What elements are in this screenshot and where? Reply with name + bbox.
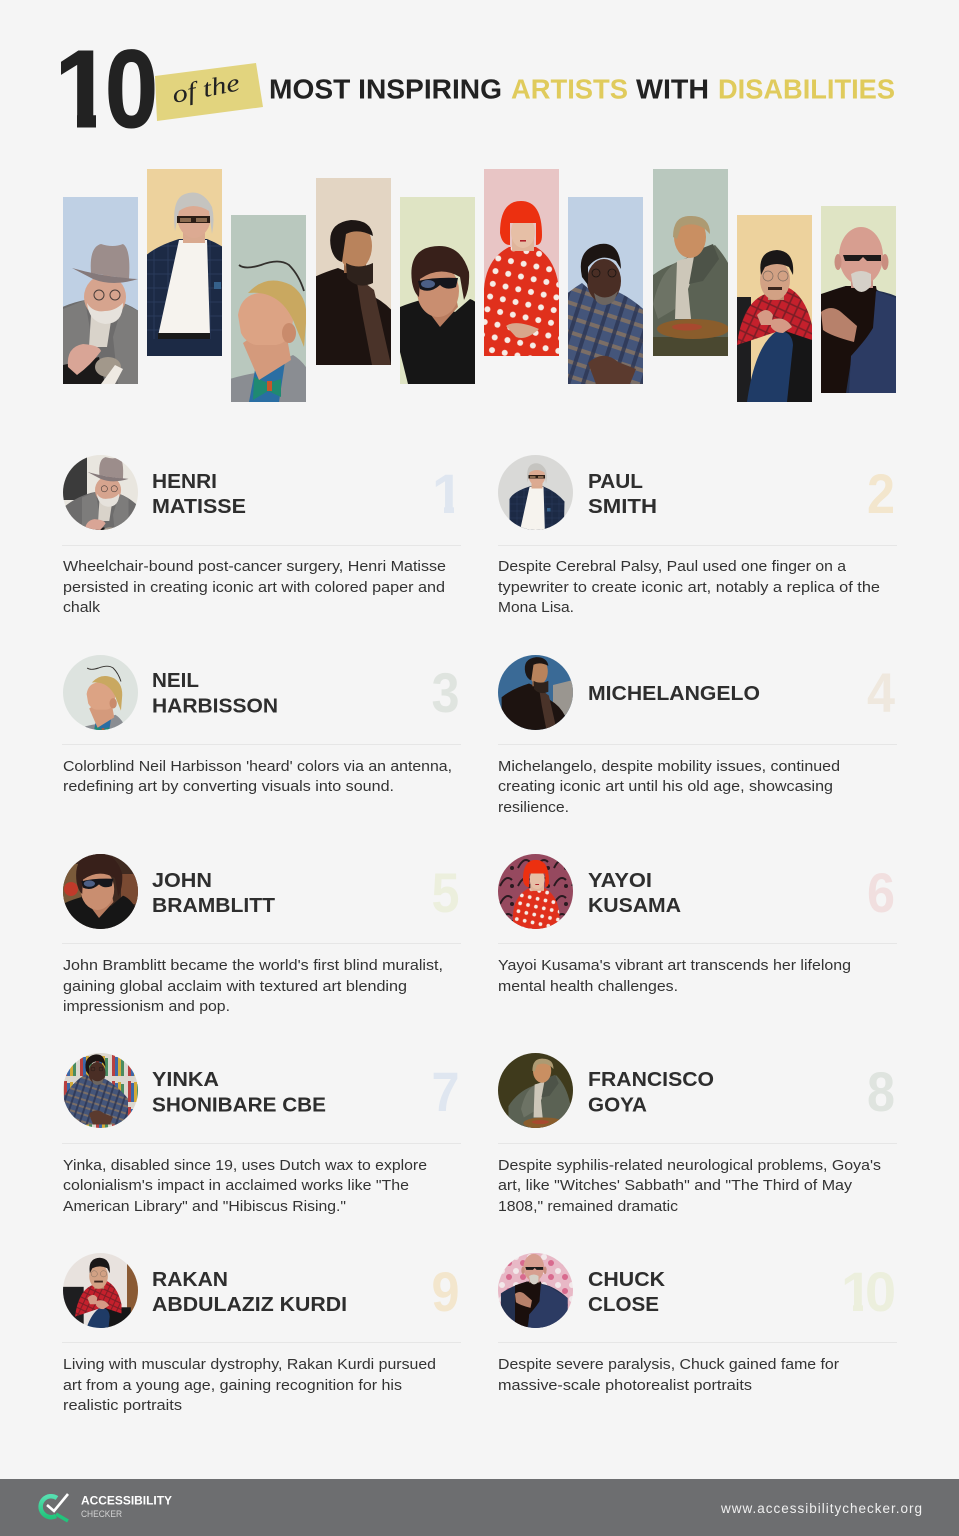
name: ABDULAZIZ KURDI xyxy=(152,1293,347,1316)
portrait strip xyxy=(33,169,933,402)
description: Wheelchair-bound post-cancer surgery, Henri Matisse xyxy=(63,558,446,575)
name: CLOSE xyxy=(588,1293,659,1316)
portrait: Paul Smith xyxy=(147,169,222,356)
name xyxy=(152,470,246,518)
name xyxy=(152,1268,347,1316)
description: impressionism and pop. xyxy=(63,998,230,1015)
footer xyxy=(0,1479,959,1536)
name: MATISSE xyxy=(152,495,246,518)
description xyxy=(63,1356,436,1414)
description: art from a young age, gaining recognition for his xyxy=(63,1377,402,1394)
title text: DISABILITIES xyxy=(718,74,895,104)
website url: www.accessibilitychecker.org xyxy=(720,1501,922,1516)
name: FRANCISCO xyxy=(588,1068,714,1091)
name: JOHN xyxy=(152,869,212,892)
logo wordmark xyxy=(81,1496,172,1519)
description xyxy=(63,758,452,795)
title text: MOST INSPIRING xyxy=(269,74,502,104)
description: mental health challenges. xyxy=(498,978,678,995)
card 10: Chuck Close xyxy=(498,1253,897,1394)
name xyxy=(588,1068,714,1116)
description: Mona Lisa. xyxy=(498,599,574,616)
number: 5 xyxy=(432,861,460,924)
description: chalk xyxy=(63,599,100,616)
name: CHUCK xyxy=(588,1268,665,1291)
card 5: John Bramblitt xyxy=(55,853,461,1015)
description xyxy=(63,957,443,1015)
portrait: Michelangelo xyxy=(316,178,391,365)
name: YINKA xyxy=(152,1068,219,1091)
description: Despite severe paralysis, Chuck gained fame for xyxy=(498,1356,839,1373)
name xyxy=(152,669,278,718)
description xyxy=(63,558,446,616)
name: YAYOI xyxy=(588,869,652,892)
name: SHONIBARE CBE xyxy=(152,1094,326,1116)
number xyxy=(844,1272,894,1312)
name: PAUL xyxy=(588,470,643,493)
icon: accessibility checker logo xyxy=(41,1494,68,1521)
description: Living with muscular dystrophy, Rakan Kurdi pursued xyxy=(63,1356,436,1373)
avatar xyxy=(63,655,138,730)
description: typewriter to create iconic art, notably a replica of the xyxy=(498,579,880,596)
description: Michelangelo, despite mobility issues, continued xyxy=(498,758,840,775)
card 1: Henri Matisse xyxy=(62,455,463,616)
number: 1 xyxy=(841,1260,872,1323)
title xyxy=(61,49,894,128)
description xyxy=(498,957,851,995)
number: 2 xyxy=(867,462,895,525)
description: massive-scale photorealist portraits xyxy=(498,1377,752,1394)
yellow banner: of the xyxy=(155,63,263,121)
title text: WITH xyxy=(636,74,709,104)
title text: ARTISTS xyxy=(511,74,628,104)
description: resilience. xyxy=(498,799,569,816)
title text xyxy=(269,74,895,104)
description xyxy=(63,1157,427,1215)
description: gaining global acclaim with textured art blending xyxy=(63,978,407,995)
logo wordmark: CHECKER xyxy=(81,1509,122,1519)
name: HARBISSON xyxy=(152,694,278,718)
avatar xyxy=(63,455,138,530)
description xyxy=(498,1157,881,1215)
avatar xyxy=(498,1053,573,1128)
number: 4 xyxy=(867,661,895,724)
description xyxy=(498,558,880,616)
name: RAKAN xyxy=(152,1268,228,1291)
number: 3 xyxy=(432,661,460,724)
portrait: Neil Harbisson xyxy=(231,215,306,402)
description xyxy=(498,1356,839,1394)
avatar xyxy=(498,455,573,530)
avatar xyxy=(498,655,573,737)
card 6: Yayoi Kusama xyxy=(498,854,897,995)
description: art, like "Witches' Sabbath" and "The Third of May xyxy=(498,1177,852,1194)
number: 0 xyxy=(865,1260,896,1323)
avatar xyxy=(63,1253,138,1328)
portrait: Henri Matisse xyxy=(63,197,138,384)
name xyxy=(588,470,657,518)
name xyxy=(588,869,681,917)
number: 8 xyxy=(867,1060,895,1123)
description: 1808," remained dramatic xyxy=(498,1198,678,1215)
description: John Bramblitt became the world's first blind muralist, xyxy=(63,957,443,974)
name: NEIL xyxy=(152,669,199,692)
number: 6 xyxy=(867,861,895,924)
name xyxy=(152,869,275,917)
portrait: Yinka Shonibare xyxy=(568,197,643,384)
card 2: Paul Smith xyxy=(498,455,897,616)
portrait: Yayoi Kusama xyxy=(484,169,559,356)
card 8: Francisco Goya xyxy=(498,1053,897,1215)
card 7: Yinka Shonibare xyxy=(62,1053,461,1215)
name xyxy=(152,1068,326,1116)
avatar xyxy=(63,1053,138,1128)
portrait: Francisco Goya xyxy=(653,169,728,356)
description: redefining art by converting visuals into sound. xyxy=(63,778,394,795)
title number 10: 0 xyxy=(105,28,158,151)
description: colonialism's impact in acclaimed works like "The xyxy=(63,1177,409,1194)
portrait: Chuck Close xyxy=(821,206,896,393)
title number 10 xyxy=(61,49,154,128)
name: KUSAMA xyxy=(588,894,681,917)
description xyxy=(498,758,840,816)
number: 7 xyxy=(432,1060,460,1123)
description: American Library" and "Hibiscus Rising." xyxy=(63,1198,346,1215)
name xyxy=(588,1268,665,1316)
name: GOYA xyxy=(588,1094,647,1116)
avatar xyxy=(498,854,573,929)
description: creating iconic art until his old age, showcasing xyxy=(498,778,833,795)
name: HENRI xyxy=(152,470,217,493)
description: Yinka, disabled since 19, uses Dutch wax to explore xyxy=(63,1157,427,1174)
description: realistic portraits xyxy=(63,1397,182,1414)
logo wordmark: ACCESSIBILITY xyxy=(81,1496,172,1508)
avatar xyxy=(498,1253,573,1332)
name: MICHELANGELO xyxy=(588,682,760,705)
yellow banner: of the: of the xyxy=(170,69,242,109)
title number 10: 1 xyxy=(52,28,113,151)
description: Colorblind Neil Harbisson 'heard' colors via an antenna, xyxy=(63,758,452,775)
description: persisted in creating iconic art with colored paper and xyxy=(63,579,445,596)
name: SMITH xyxy=(588,495,657,518)
card 9: Rakan Kurdi xyxy=(62,1253,461,1414)
number: 9 xyxy=(432,1260,460,1323)
description: Yayoi Kusama's vibrant art transcends her lifelong xyxy=(498,957,851,974)
portrait: Rakan Kurdi xyxy=(737,215,812,402)
name: BRAMBLITT xyxy=(152,894,275,917)
number: 1 xyxy=(432,462,463,525)
avatar xyxy=(63,854,138,929)
card 4: Michelangelo xyxy=(498,655,897,816)
description: Despite Cerebral Palsy, Paul used one finger on a xyxy=(498,558,847,575)
portrait: John Bramblitt xyxy=(400,197,475,384)
card 3: Neil Harbisson xyxy=(62,655,461,795)
description: Despite syphilis-related neurological problems, Goya's xyxy=(498,1157,881,1174)
